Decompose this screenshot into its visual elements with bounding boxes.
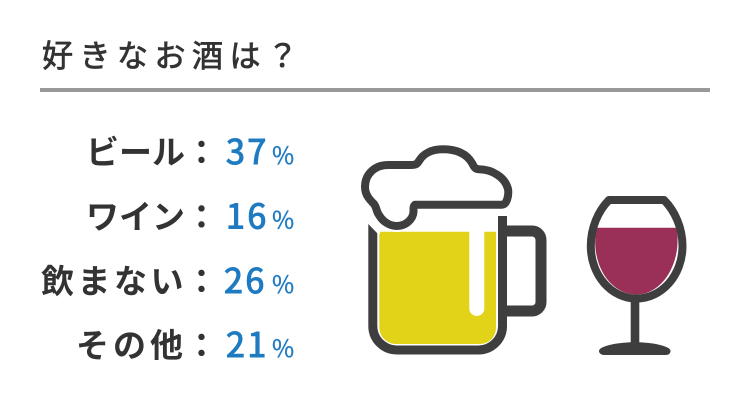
row: beer: %	[272, 136, 294, 171]
row: wine	[86, 190, 294, 238]
row: don't drink	[41, 254, 294, 303]
title: 好きなお酒は？	[42, 31, 304, 76]
row: other	[76, 318, 294, 367]
glass bowl	[591, 200, 682, 298]
row: beer: 37	[226, 125, 269, 174]
row: don't drink: %	[272, 265, 294, 300]
stem	[631, 298, 639, 346]
row: wine: ：	[185, 190, 218, 238]
icon: wine glass	[591, 200, 682, 355]
wine	[595, 228, 678, 294]
row: wine: ワイン	[86, 190, 185, 238]
row: other: %	[272, 329, 294, 364]
row: other: 21	[226, 318, 269, 367]
mug handle	[503, 231, 541, 311]
beer liquid	[379, 232, 496, 344]
row: don't drink: 飲まない	[41, 255, 187, 303]
mug body	[373, 216, 502, 350]
row: wine: 16	[226, 190, 269, 238]
row: beer: ビール	[86, 126, 185, 174]
row: beer: ：	[185, 126, 218, 174]
row: don't drink: ：	[185, 255, 218, 303]
foam	[365, 149, 508, 226]
row: other: その他	[76, 319, 187, 367]
foam halo	[365, 149, 508, 226]
row: beer	[86, 125, 294, 174]
base	[599, 342, 670, 355]
row: other: ：	[185, 319, 218, 367]
row: don't drink: 26	[224, 254, 267, 303]
row: wine: %	[272, 200, 294, 236]
icon: beer mug	[364, 149, 541, 350]
